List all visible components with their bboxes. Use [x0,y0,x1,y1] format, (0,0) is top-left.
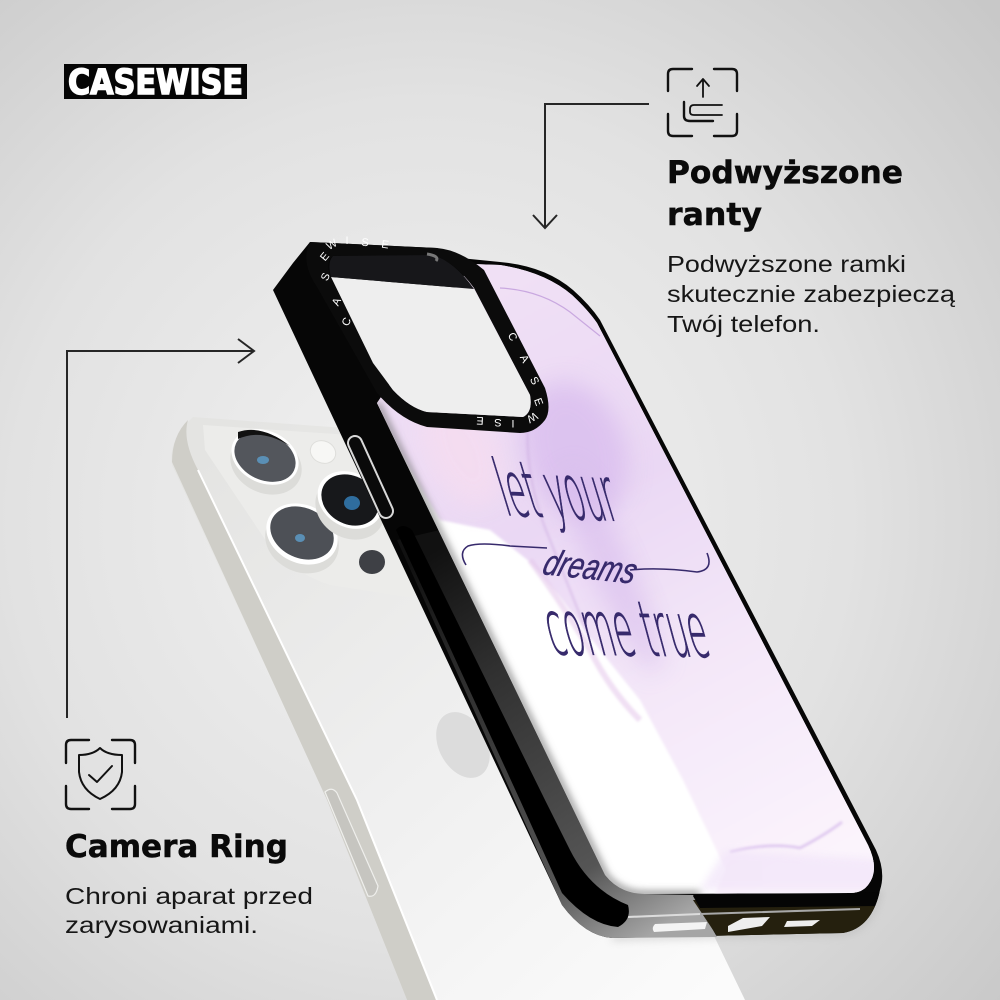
ring lettering: E [381,239,389,251]
quote flourishes [462,544,709,572]
icon: shield [66,740,135,809]
text: camera ring description: Chroni aparat przed [65,883,313,909]
ring lettering: E [476,414,484,426]
ring lettering: I [345,235,349,247]
watercolour wash [370,250,890,900]
phone case: come true [534,584,718,676]
lens 2 [254,492,350,585]
white phone behind the case [171,417,745,1000]
side button [325,789,378,896]
inner ring wall [329,255,474,289]
text: raised edges description: skutecznie zabezpieczą [667,281,956,307]
ring lettering: A [330,296,344,308]
text: camera ring description [65,883,313,938]
lens 1 [220,419,312,506]
heading: raised edges: Podwyższone [667,155,903,191]
text: raised edges description [667,251,956,337]
camera plateau [203,425,430,597]
speaker slots [653,917,820,932]
ring lettering: S [319,271,333,283]
inner edge shadow [377,403,700,894]
arrow: to camera ring [67,339,254,718]
artwork screen [377,264,874,894]
ring lettering: C [340,316,354,328]
icon: raised edges [668,69,737,136]
flash [307,437,339,467]
camera ring [306,235,548,433]
ring lettering: S [527,375,541,387]
ring lettering [318,235,545,429]
phone case [273,235,900,938]
apple logo [425,703,501,787]
text: raised edges description: Podwyższone ramki [667,251,906,277]
arrow: to raised edges [533,104,649,228]
ring lettering: E [531,396,545,408]
lens opening [331,277,531,417]
phone case: let your [484,443,628,540]
sensor [359,550,385,574]
heading: raised edges [667,155,903,233]
logo: CASEWISE [68,63,243,103]
frame bottom edge [628,892,880,936]
ring lettering: A [517,353,531,366]
black inner strip [396,526,629,927]
case frame [273,242,882,938]
ring lettering: E [318,250,332,264]
lens 3 [304,460,396,552]
phone side band [172,420,437,1000]
ring lettering: W [325,237,340,253]
ring lettering: S [494,416,502,428]
ring lettering: S [361,237,369,249]
ring lettering: W [524,409,539,425]
ring lettering: I [511,417,515,429]
case shadow [612,890,880,938]
text: camera ring description: zarysowaniami. [65,912,258,938]
volume button cutout [355,443,386,511]
heading: camera ring: Camera Ring [65,829,288,865]
heading: raised edges: ranty [667,197,762,233]
phone back [171,417,745,1000]
quote: dreams: dreams [539,542,643,591]
text: raised edges description: Twój telefon. [667,311,820,337]
translucent lower frame [397,530,717,938]
ring lettering: C [505,331,519,343]
